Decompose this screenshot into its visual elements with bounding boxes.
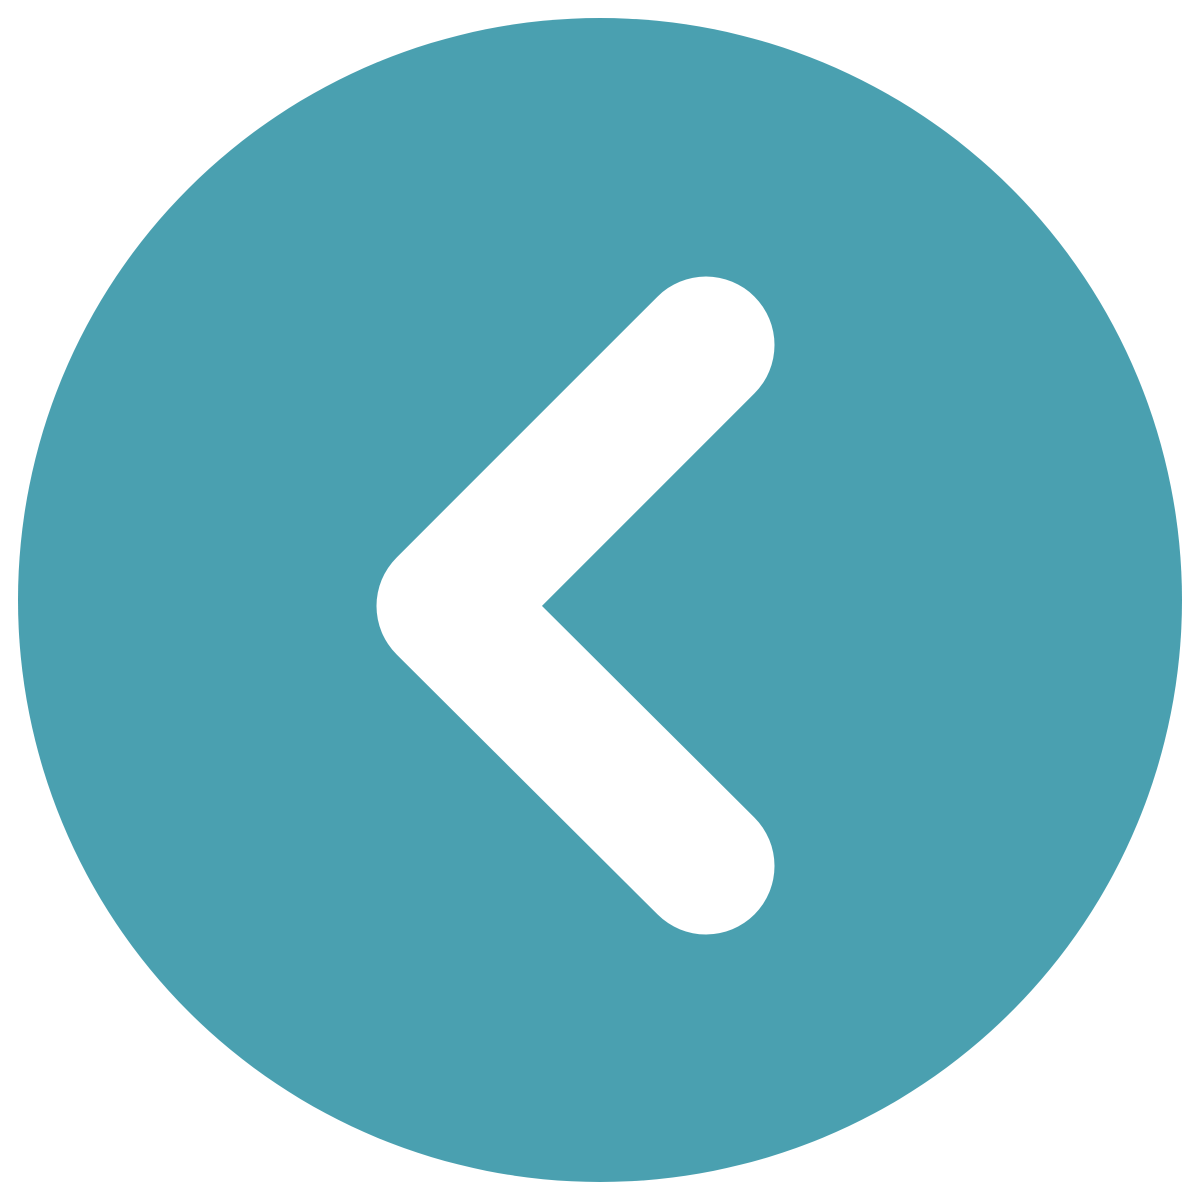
white left chevron xyxy=(445,345,706,866)
